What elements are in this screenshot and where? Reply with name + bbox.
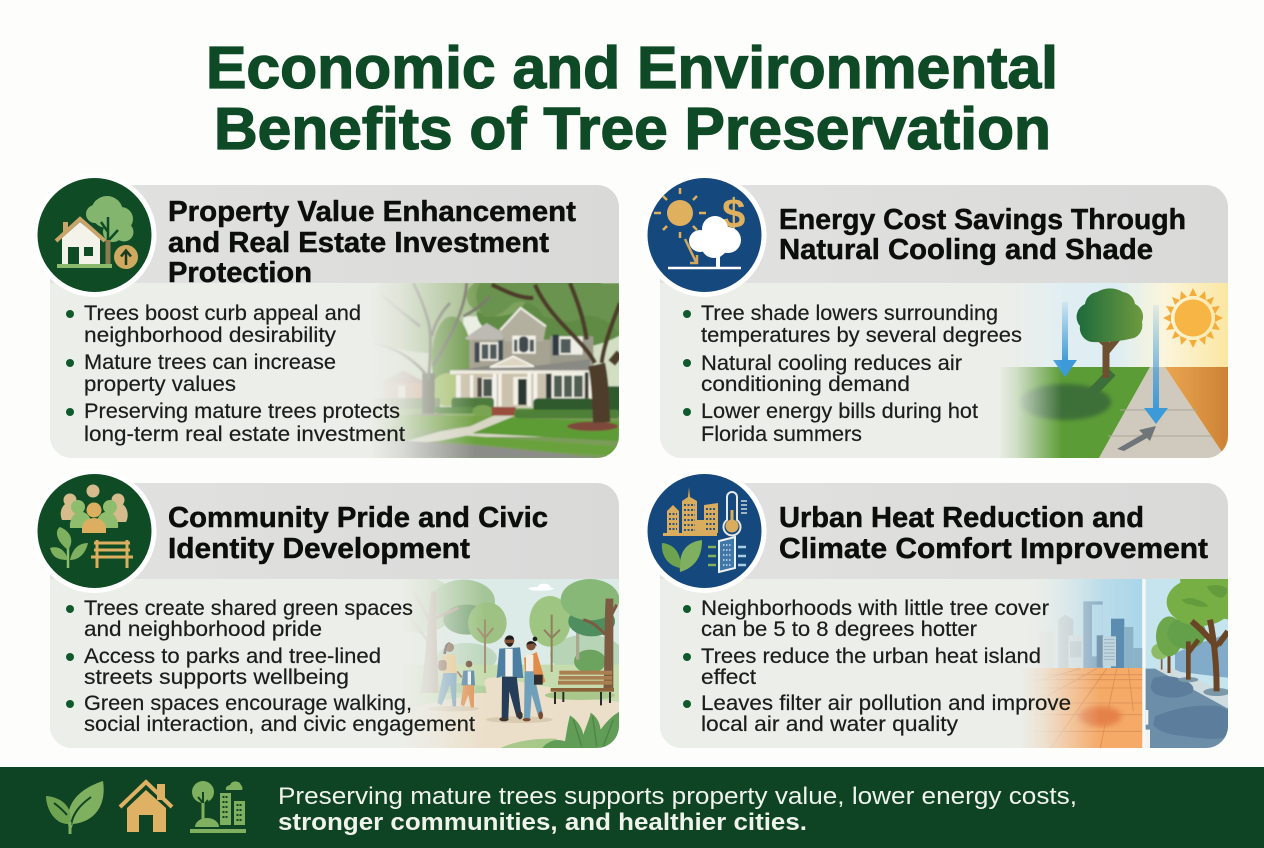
- panel: urban heat: [642, 469, 1233, 749]
- bullet list: Green spaces encourage walking,: [84, 692, 412, 715]
- icon circle: sun, dollar, tree: $: [722, 190, 745, 237]
- heading: [779, 502, 1208, 565]
- heading: and Real Estate Investment: [168, 227, 549, 259]
- bullet list: long-term real estate investment: [84, 423, 405, 446]
- bullet list: and neighborhood pride: [84, 618, 322, 641]
- bullet list: can be 5 to 8 degrees hotter: [701, 618, 977, 641]
- left tree: [422, 372, 436, 414]
- bullet list: Preserving mature trees protects: [84, 400, 400, 423]
- bullet list: conditioning demand: [701, 373, 910, 396]
- bullet list: property values: [84, 373, 236, 396]
- bullet list: Florida summers: [701, 423, 862, 446]
- title: Economic and Environmental: [206, 35, 1058, 101]
- bullet list: [66, 597, 475, 736]
- bullet list: neighborhood desirability: [84, 324, 337, 347]
- bullet list: [683, 597, 1071, 736]
- bullet list: [66, 302, 405, 446]
- heading: [168, 196, 576, 289]
- bullet list: Trees reduce the urban heat island: [701, 645, 1041, 668]
- heading: Identity Development: [168, 533, 470, 565]
- bullet list: Trees boost curb appeal and: [84, 302, 361, 325]
- title: Benefits of Tree Preservation: [214, 96, 1051, 162]
- photo: house with mature trees: [379, 283, 619, 458]
- people: [437, 635, 545, 721]
- bullet list: Lower energy bills during hot: [701, 400, 978, 423]
- title: [206, 35, 1058, 162]
- footer banner: [0, 767, 1264, 848]
- icon circle: people, plant, bench: [32, 469, 156, 593]
- heading: Energy Cost Savings Through: [779, 204, 1186, 236]
- upper canopy over the house: [476, 283, 620, 333]
- bullet list: Mature trees can increase: [84, 351, 336, 374]
- bullet list: Neighborhoods with little tree cover: [701, 597, 1049, 620]
- icon: leaves: [46, 781, 104, 834]
- heading: Climate Comfort Improvement: [779, 533, 1208, 565]
- icon circle: city, thermometer, leaf, filter: [642, 469, 766, 593]
- heading: Community Pride and Civic: [168, 502, 548, 534]
- heading: [168, 502, 548, 565]
- bullet list: Natural cooling reduces air: [701, 352, 962, 375]
- bullet list: Leaves filter air pollution and improve: [701, 692, 1071, 715]
- bullet list: Tree shade lowers surrounding: [701, 302, 998, 325]
- closing message: Preserving mature trees supports property value, lower energy costs,: [278, 783, 1077, 810]
- bullet list: streets supports wellbeing: [84, 666, 349, 689]
- icon circle: house, tree, arrow: [32, 173, 156, 297]
- heading: Protection: [168, 257, 312, 289]
- illustration: family in park: [413, 579, 619, 748]
- closing message: stronger communities, and healthier cities.: [278, 809, 807, 836]
- bullet list: local air and water quality: [701, 713, 959, 736]
- illustration: hot city vs tree-lined street: [1026, 579, 1228, 748]
- heading: Property Value Enhancement: [168, 196, 576, 228]
- bullet list: temperatures by several degrees: [701, 324, 1022, 347]
- bench: [551, 671, 614, 705]
- right tree: [597, 365, 602, 422]
- bullet list: [683, 302, 1022, 446]
- illustration: tree shade vs sun: [998, 283, 1228, 458]
- heading: Natural Cooling and Shade: [779, 234, 1153, 266]
- bullet list: Trees create shared green spaces: [84, 597, 413, 620]
- bullet list: effect: [701, 666, 756, 689]
- closing message: [278, 783, 1077, 836]
- heading: Urban Heat Reduction and: [779, 502, 1144, 534]
- bullet list: social interaction, and civic engagement: [84, 713, 475, 736]
- panel: property value: [32, 173, 637, 459]
- bullet list: Access to parks and tree-lined: [84, 645, 381, 668]
- icon: trees and city: [190, 781, 246, 833]
- icon circle: sun, dollar, tree: [642, 173, 766, 297]
- heading: [779, 204, 1186, 266]
- panel: energy savings: [642, 173, 1228, 458]
- panel: community pride: [32, 469, 623, 749]
- icon: house: [120, 782, 172, 832]
